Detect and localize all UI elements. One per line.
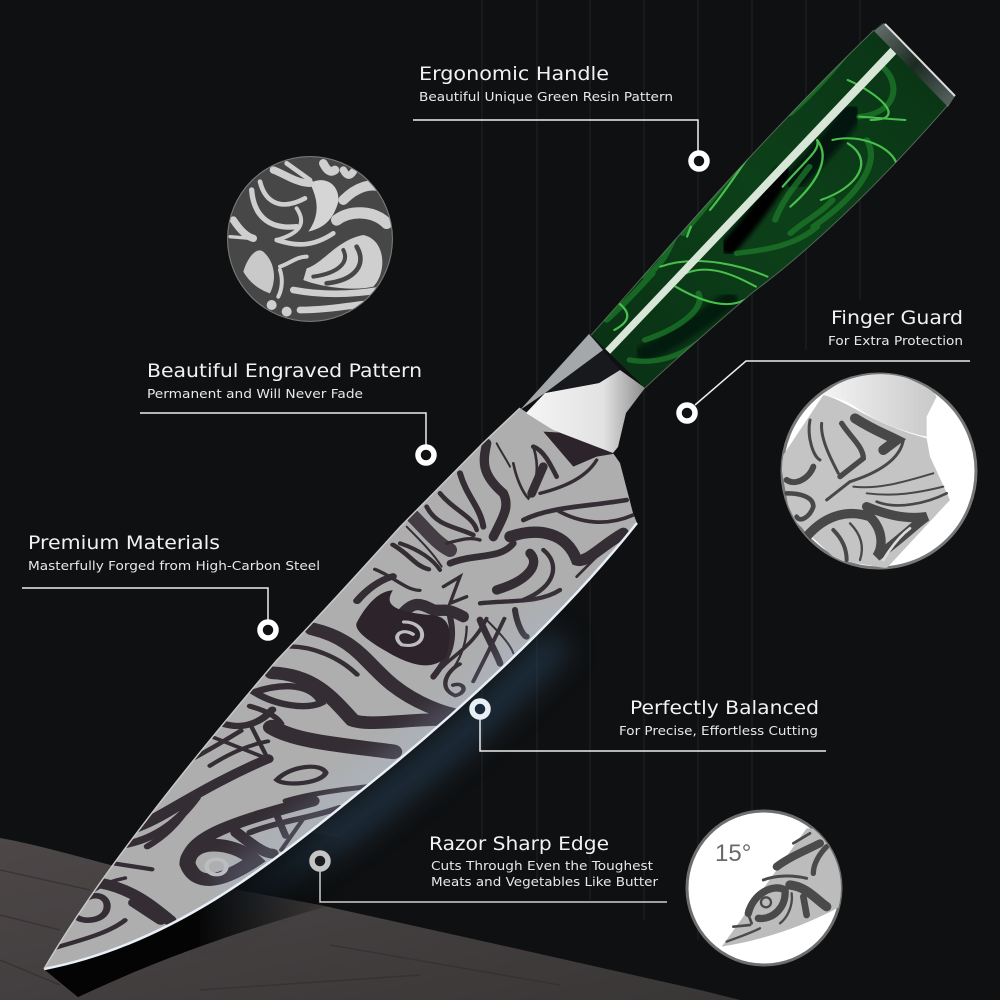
bolster / finger guard bbox=[520, 334, 645, 453]
heading: Finger Guard bbox=[831, 307, 963, 329]
knife cast shadow near tip bbox=[45, 900, 200, 997]
subheading: Masterfully Forged from High-Carbon Steel bbox=[28, 558, 320, 573]
marker bbox=[691, 153, 707, 169]
white stripe bbox=[605, 44, 900, 354]
marker bbox=[418, 447, 434, 463]
subheading: Beautiful Unique Green Resin Pattern bbox=[419, 89, 673, 104]
lower engraving bbox=[54, 545, 504, 948]
handle end cap bbox=[874, 23, 955, 107]
subheading line two: Meats and Vegetables Like Butter bbox=[431, 874, 659, 889]
blade edge highlight bbox=[44, 523, 637, 969]
handle edge sheen bbox=[591, 30, 948, 388]
callout: engraved pattern bbox=[140, 360, 434, 463]
subheading: For Precise, Effortless Cutting bbox=[619, 723, 818, 738]
detail circle: blade tip angle bbox=[687, 811, 843, 965]
marker bbox=[312, 853, 328, 869]
detail circle: engraved pattern bbox=[227, 156, 393, 322]
upper engraving bbox=[400, 432, 633, 677]
callout: razor sharp edge bbox=[312, 833, 667, 902]
blue reflection on blade bbox=[220, 610, 560, 890]
callout: ergonomic handle bbox=[413, 63, 707, 169]
callout: finger guard bbox=[679, 307, 970, 421]
heading: Beautiful Engraved Pattern bbox=[147, 360, 422, 382]
wooden table surface bbox=[0, 838, 740, 1000]
handle bbox=[591, 23, 955, 388]
callout: premium materials bbox=[22, 532, 320, 638]
callout: perfectly balanced bbox=[472, 697, 826, 751]
marker bbox=[260, 622, 276, 638]
marker bbox=[472, 701, 488, 717]
resin swirls bbox=[607, 47, 905, 361]
marker bbox=[679, 405, 695, 421]
15 degree label: 15° bbox=[715, 840, 751, 867]
blade blue glow bbox=[200, 640, 560, 915]
heading: Razor Sharp Edge bbox=[429, 833, 609, 855]
subheading: For Extra Protection bbox=[828, 333, 963, 348]
subheading line one: Cuts Through Even the Toughest bbox=[431, 858, 653, 873]
heading: Perfectly Balanced bbox=[630, 697, 819, 719]
subheading: Permanent and Will Never Fade bbox=[147, 386, 363, 401]
heading: Ergonomic Handle bbox=[419, 63, 609, 85]
blade bbox=[44, 408, 637, 969]
detail circle: finger guard bbox=[780, 374, 976, 568]
heading: Premium Materials bbox=[28, 532, 220, 554]
knife cast shadow bbox=[45, 830, 350, 997]
